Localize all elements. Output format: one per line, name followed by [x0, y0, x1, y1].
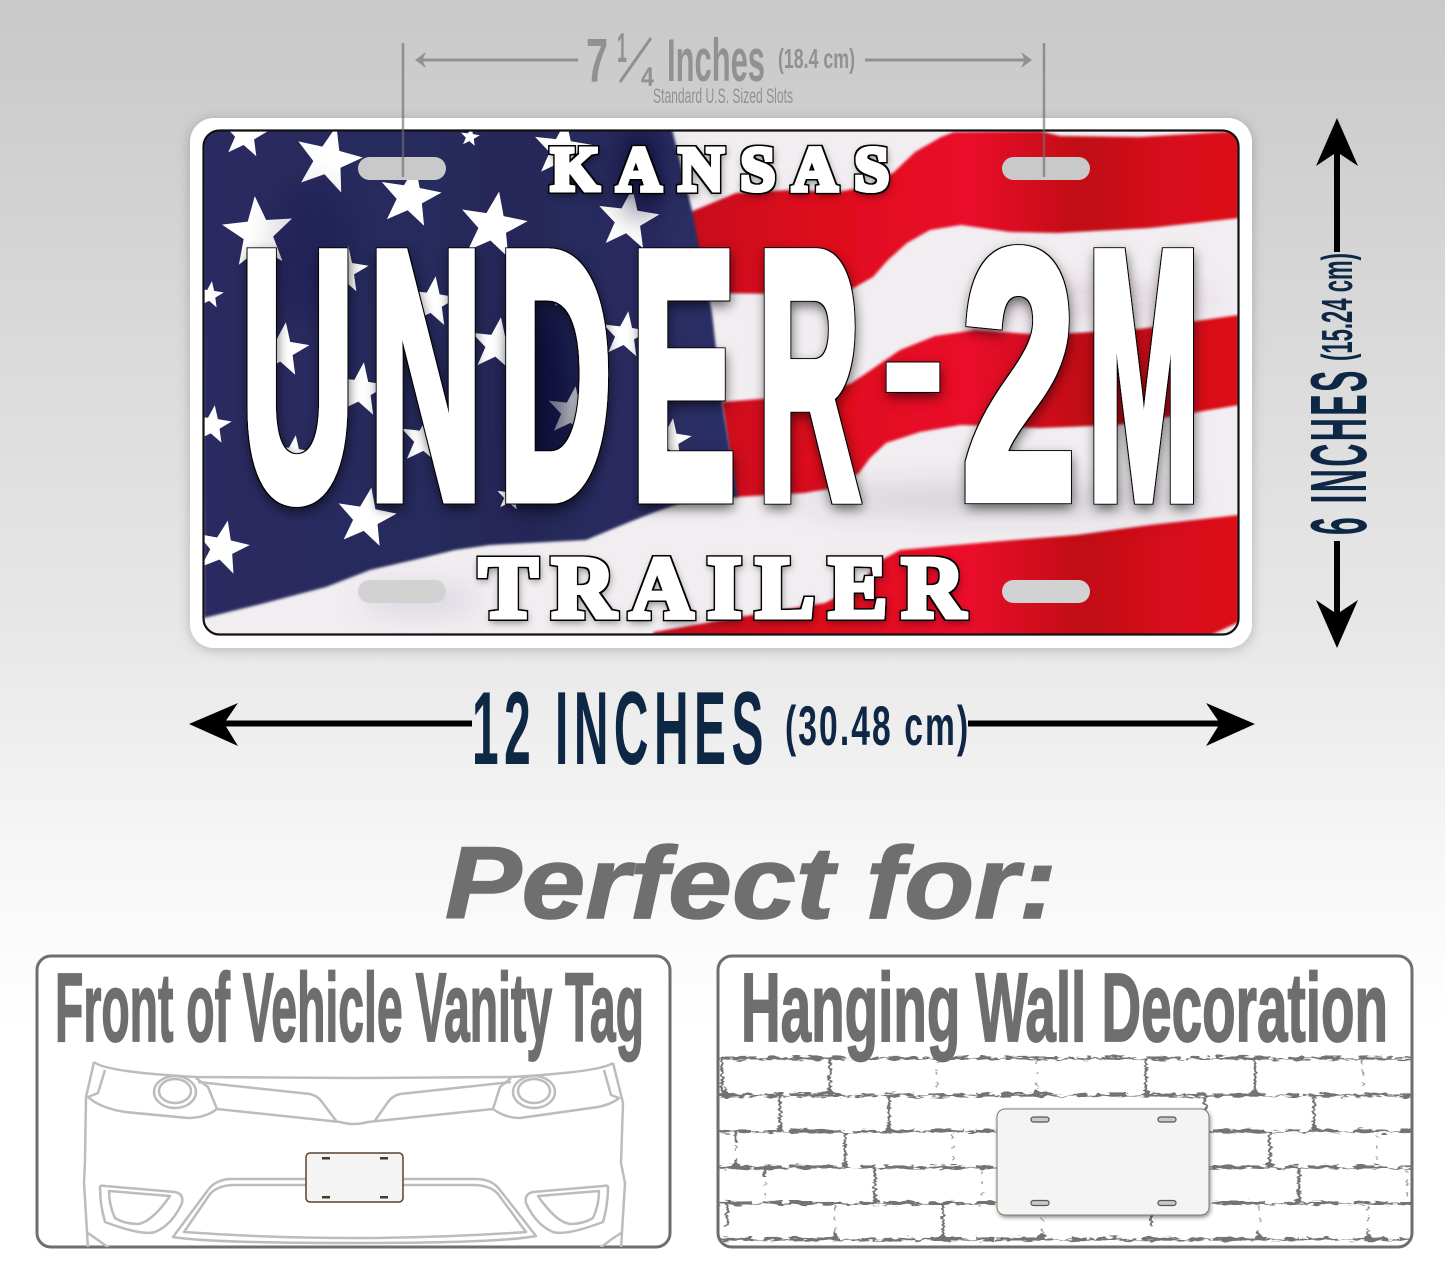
plate number: UNDER-2M: 2: [962, 179, 1076, 572]
plate text: TRAILER: TRAILER: [479, 540, 966, 637]
height dimension: 6 inches: [1294, 118, 1383, 648]
left width arrow: [189, 703, 472, 746]
plate number: UNDER-2M: -: [879, 219, 948, 494]
bottom height arrow: [1316, 541, 1358, 648]
slot spacing dimension: 7 1/4 inches: [403, 24, 1044, 177]
heading: Perfect for: Perfect for:: [445, 826, 1057, 940]
panel frame: [37, 956, 670, 1247]
flag border: [204, 130, 1238, 634]
right width arrow: [968, 703, 1255, 746]
width label: 12 INCHES: [472, 671, 769, 787]
panel: front of vehicle vanity tag: [37, 953, 670, 1248]
slot measurement label: 7: [586, 27, 608, 96]
top height arrow: [1316, 118, 1358, 252]
slot measurement label: (18.4 cm): [778, 43, 855, 74]
slot measurement label: 1: [617, 24, 627, 71]
brick wall drawing: [718, 1058, 1412, 1240]
license plate: [190, 108, 1252, 648]
blank plate on wall: [997, 1109, 1209, 1215]
car front line drawing: [84, 1062, 625, 1248]
slot measurement label: [586, 24, 855, 96]
plate number: UNDER-2M: M: [1088, 180, 1199, 572]
plate text: KANSAS: KANSAS: [551, 136, 889, 204]
slot guide lines: [403, 43, 1044, 177]
height metric label: (15.24 cm): [1313, 253, 1362, 361]
mounting slots: [358, 157, 1090, 603]
right slot arrow: [865, 52, 1032, 68]
left slot arrow: [415, 52, 578, 68]
width metric label: (30.48 cm): [785, 694, 970, 757]
infographic: license plate size chart: Front of Vehicle Vanity Tag: [55, 953, 644, 1062]
slot measurement label: 4: [641, 62, 654, 92]
slot measurement label: Inches: [667, 27, 765, 94]
plate number: UNDER-2M: R: [758, 178, 860, 572]
height label: 6 INCHES: [1294, 368, 1383, 535]
american flag artwork: [191, 108, 1239, 640]
plate number: UNDER-2M: [241, 178, 1199, 572]
plate white body: [190, 118, 1252, 648]
width dimension: 12 inches: [189, 671, 1255, 787]
panel frame: [718, 956, 1412, 1247]
standard slots note: Standard U.S. Sized Slots: [653, 85, 793, 108]
small blank plate on car: [306, 1153, 403, 1202]
panel: hanging wall decoration: [718, 953, 1412, 1247]
plate number: UNDER-2M: UNDE: [241, 178, 736, 572]
